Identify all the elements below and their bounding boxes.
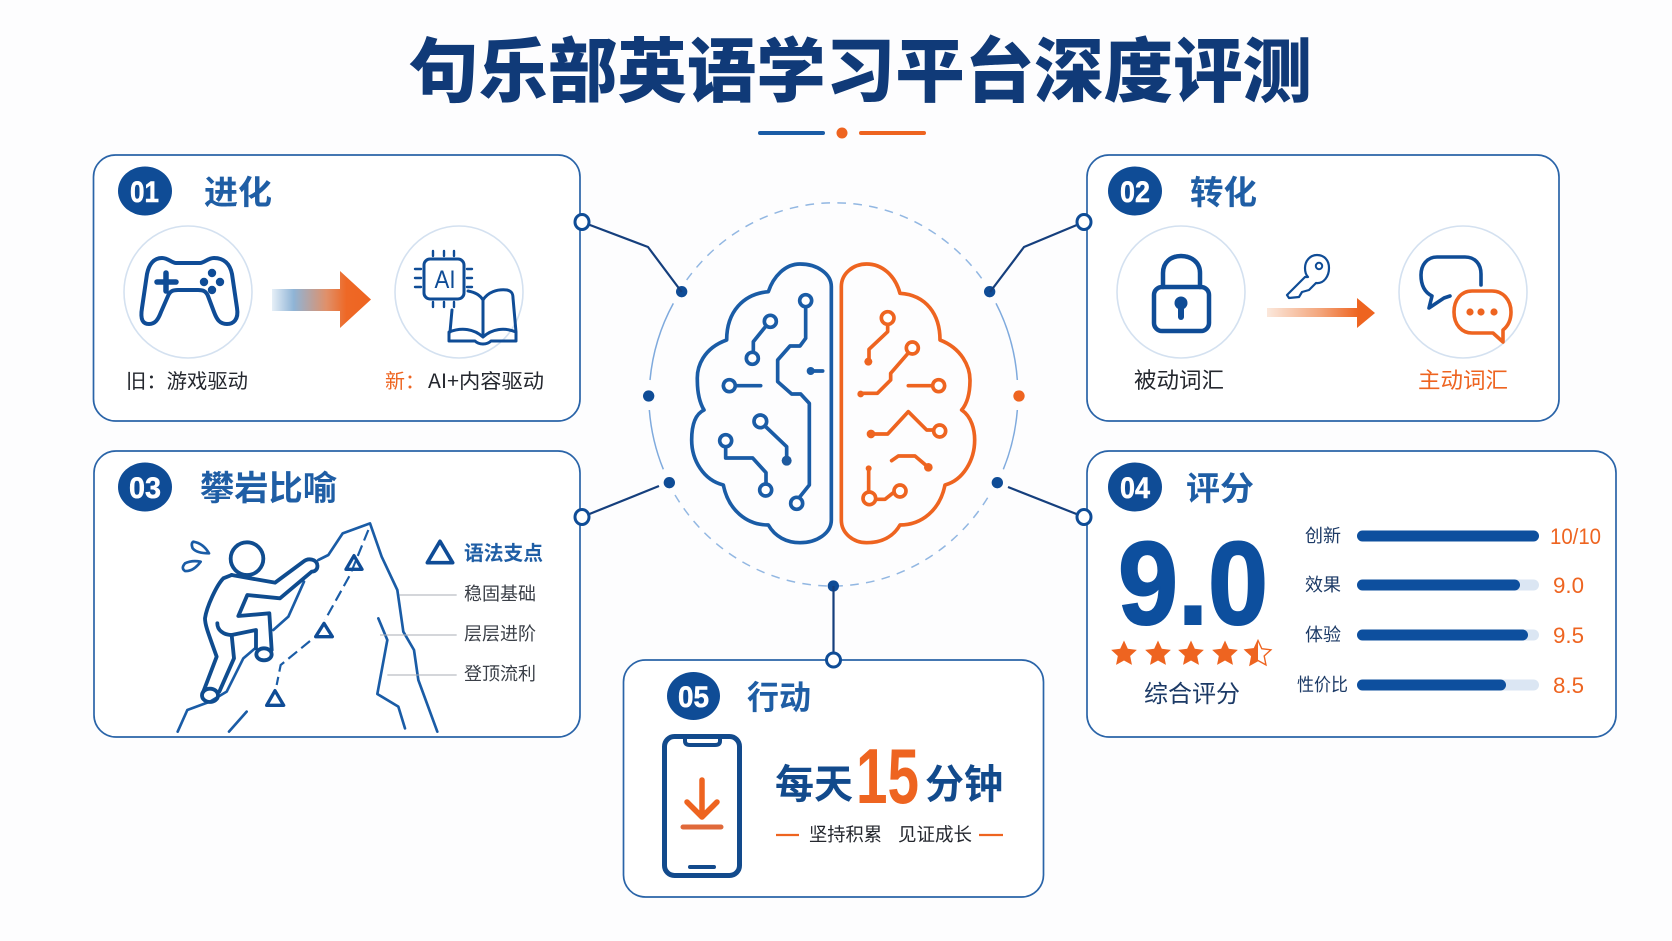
bar: value — [1297, 671, 1584, 698]
central brain hub — [643, 203, 1025, 592]
left brain hemisphere — [692, 264, 831, 543]
bar: value: 性价比 — [1297, 671, 1348, 697]
panel: 03 climbing metaphor — [94, 451, 580, 737]
panel: 04 score — [1087, 451, 1616, 737]
connector: card 03 to hub — [575, 486, 659, 524]
bar: effect: 效果 — [1305, 571, 1341, 597]
icon: game controller — [124, 226, 252, 358]
badge 01: 01 — [130, 176, 159, 209]
legend triangle — [427, 541, 453, 563]
arrow: old to new — [272, 271, 371, 328]
label: fluent at the top: 登顶流利 — [464, 660, 536, 686]
icon: speech bubbles — [1399, 226, 1527, 358]
legend: grammar holds: 语法支点 — [464, 537, 543, 566]
orbit nodes — [643, 286, 1025, 592]
heading: 攀岩比喻: 攀岩比喻 — [200, 461, 337, 510]
badge 04: 04 — [1120, 472, 1150, 505]
title: 句乐部英语学习平台深度评测 — [409, 16, 1312, 117]
bar chart: sub-scores — [1297, 522, 1601, 698]
callout: 15 minutes a day: 分钟 — [925, 752, 1003, 810]
icon: key — [1287, 255, 1329, 298]
tagline — [776, 821, 1003, 847]
grammar hold triangles — [267, 556, 362, 705]
heading: 进化: 进化 — [204, 166, 272, 214]
badge 02: 02 — [1120, 176, 1150, 209]
bar: effect: 9.0 — [1553, 573, 1584, 598]
connector: card 01 to hub — [575, 214, 682, 292]
connector: card 05 to hub — [826, 586, 840, 667]
bar: experience: 9.5 — [1553, 623, 1584, 648]
bar: innovation — [1305, 522, 1601, 549]
icon: padlock — [1117, 226, 1245, 358]
badge 05: 05 — [678, 681, 709, 714]
bar: value: 8.5 — [1553, 673, 1584, 698]
heading: 转化: 转化 — [1190, 166, 1257, 214]
tagline: 坚持积累 — [809, 821, 882, 847]
panel: 01 evolution — [94, 155, 580, 421]
icon: AI chip and book — [395, 226, 523, 358]
connector: card 02 to hub — [990, 214, 1091, 292]
dashed route — [277, 530, 368, 685]
overall score: 9.0 — [1118, 518, 1268, 650]
label: new: AI+内容驱动 — [428, 365, 544, 394]
label: solid foundation: 稳固基础 — [464, 580, 536, 606]
label: active vocabulary: 主动词汇 — [1418, 363, 1508, 395]
bar: innovation: 10/10 — [1550, 524, 1601, 549]
label: new — [385, 365, 544, 394]
badge 03 — [118, 462, 172, 512]
label: step by step: 层层进阶 — [464, 620, 536, 646]
badge 03: 03 — [129, 472, 161, 505]
right brain hemisphere — [841, 264, 975, 543]
heading: 行动: 行动 — [747, 671, 811, 719]
sweat drops — [183, 542, 209, 571]
label: overall score: 综合评分 — [1144, 674, 1240, 709]
heading: 评分: 评分 — [1186, 462, 1254, 510]
badge 01 — [118, 166, 172, 216]
badge 04 — [1108, 462, 1162, 512]
star rating — [1111, 640, 1271, 665]
climbing illustration — [178, 523, 457, 732]
bar: effect — [1305, 571, 1584, 598]
orbit ring — [649, 203, 1017, 586]
bar: experience — [1305, 621, 1584, 648]
bar: experience: 体验 — [1305, 621, 1341, 647]
title divider — [760, 128, 924, 138]
icon: AI chip and book: AI — [434, 266, 456, 294]
label: old: 旧：游戏驱动 — [126, 365, 248, 394]
panel: 05 action — [624, 660, 1044, 897]
bar: innovation: 创新 — [1305, 522, 1341, 548]
badge 02 — [1108, 166, 1162, 216]
connector: card 04 to hub — [1008, 487, 1091, 524]
arrow: passive to active — [1267, 298, 1375, 328]
callout: 15 minutes a day: 每天 — [775, 752, 853, 810]
leader lines — [380, 595, 457, 675]
callout: 15 minutes a day: 15 — [856, 732, 919, 820]
climber — [202, 542, 317, 702]
label: new: 新： — [385, 365, 425, 394]
tagline: 见证成长 — [898, 821, 972, 847]
icon: phone with download — [664, 736, 740, 876]
badge 05 — [667, 672, 720, 720]
rock face — [178, 523, 437, 732]
label: passive vocabulary: 被动词汇 — [1134, 363, 1224, 395]
panel: 02 transformation — [1087, 155, 1559, 421]
callout: 15 minutes a day — [775, 732, 1003, 820]
